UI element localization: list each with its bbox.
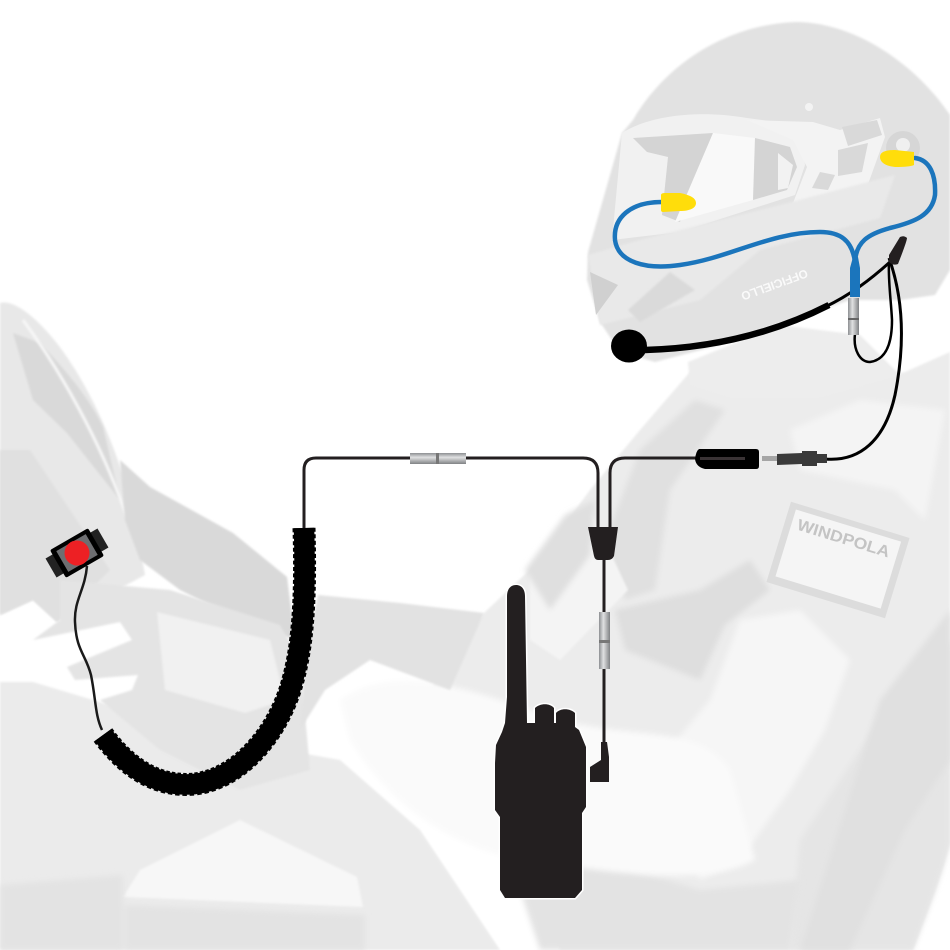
thin mic wire xyxy=(825,262,890,307)
plug body xyxy=(777,451,827,466)
light leg panel xyxy=(123,820,363,907)
chin vent right xyxy=(628,272,695,322)
radio plug xyxy=(590,742,609,782)
foam mic ball xyxy=(611,330,647,362)
helmet brand text: OFFICIELLO xyxy=(739,266,810,303)
earbud cable left and right xyxy=(615,158,935,266)
visor white streak xyxy=(675,133,755,222)
shoulder belt band xyxy=(605,400,725,600)
lower leg strip xyxy=(0,875,365,950)
wheel highlight ring xyxy=(23,320,127,517)
seat side panel xyxy=(800,610,950,950)
arm strap dark area xyxy=(615,560,770,680)
glove back panel xyxy=(157,612,285,713)
yellow ear plug right xyxy=(880,150,914,167)
visor dark top xyxy=(633,133,713,222)
yellow ear plug left xyxy=(661,193,696,212)
cable to headset jack block xyxy=(610,458,700,530)
top vent screw xyxy=(805,103,813,111)
upper glove xyxy=(120,460,295,640)
silver headset connector xyxy=(848,298,859,335)
left ear cable xyxy=(615,202,855,266)
visor small glare xyxy=(778,153,793,190)
socket inner slot xyxy=(700,457,745,460)
glove behind buckle xyxy=(525,500,595,610)
wheel lower spoke xyxy=(0,450,110,622)
steering wheel xyxy=(0,303,145,622)
pod detail panels xyxy=(812,120,882,190)
loop wire under connector xyxy=(855,262,892,362)
headset 3.5mm plug xyxy=(889,236,907,265)
harness buckle plate xyxy=(530,510,628,660)
suit shoulder highlight xyxy=(790,400,945,520)
inline silver connector xyxy=(410,453,466,464)
chin vent left xyxy=(590,272,618,315)
microphone boom xyxy=(611,262,890,362)
side pod xyxy=(747,118,885,210)
torso and seat base xyxy=(430,352,950,950)
plug tip xyxy=(762,456,777,461)
black radio silhouette xyxy=(495,585,586,898)
button face xyxy=(56,534,98,572)
right ear cable xyxy=(855,158,935,262)
button straps xyxy=(46,528,108,578)
visor dark right xyxy=(753,138,797,200)
patch lettering: WINDPOLA xyxy=(795,517,892,561)
seat shading xyxy=(790,640,950,950)
ear plate xyxy=(886,131,920,165)
leg xyxy=(0,682,500,950)
cable to coil xyxy=(304,458,598,530)
thick boom xyxy=(645,305,829,350)
vertical silver connector xyxy=(599,612,610,669)
cable from jack to headset xyxy=(825,258,902,459)
bottom of seat band xyxy=(500,830,800,950)
inline black jack socket xyxy=(695,449,759,469)
push-to-talk button wire xyxy=(75,566,102,730)
chin guard xyxy=(588,175,895,325)
blue connector xyxy=(850,257,860,297)
cable to radio xyxy=(602,558,606,745)
wheel inner dark xyxy=(13,333,120,500)
coil ridges xyxy=(103,528,305,784)
upper sleeve with stripes xyxy=(660,610,850,880)
chest patch xyxy=(766,502,910,618)
button body xyxy=(50,528,104,578)
wrist cuff xyxy=(300,595,484,730)
main cable run xyxy=(304,258,902,745)
red button xyxy=(60,536,94,570)
coiled cord xyxy=(103,528,305,784)
neck collar xyxy=(688,325,900,398)
icon: push-to-talk button xyxy=(43,524,111,582)
forearm white sleeve xyxy=(340,681,755,876)
3.5mm stereo plug xyxy=(762,451,827,466)
visor rim xyxy=(612,114,805,240)
splitter xyxy=(588,527,618,560)
helmet shell xyxy=(587,22,950,362)
lower glove hand xyxy=(33,580,310,790)
